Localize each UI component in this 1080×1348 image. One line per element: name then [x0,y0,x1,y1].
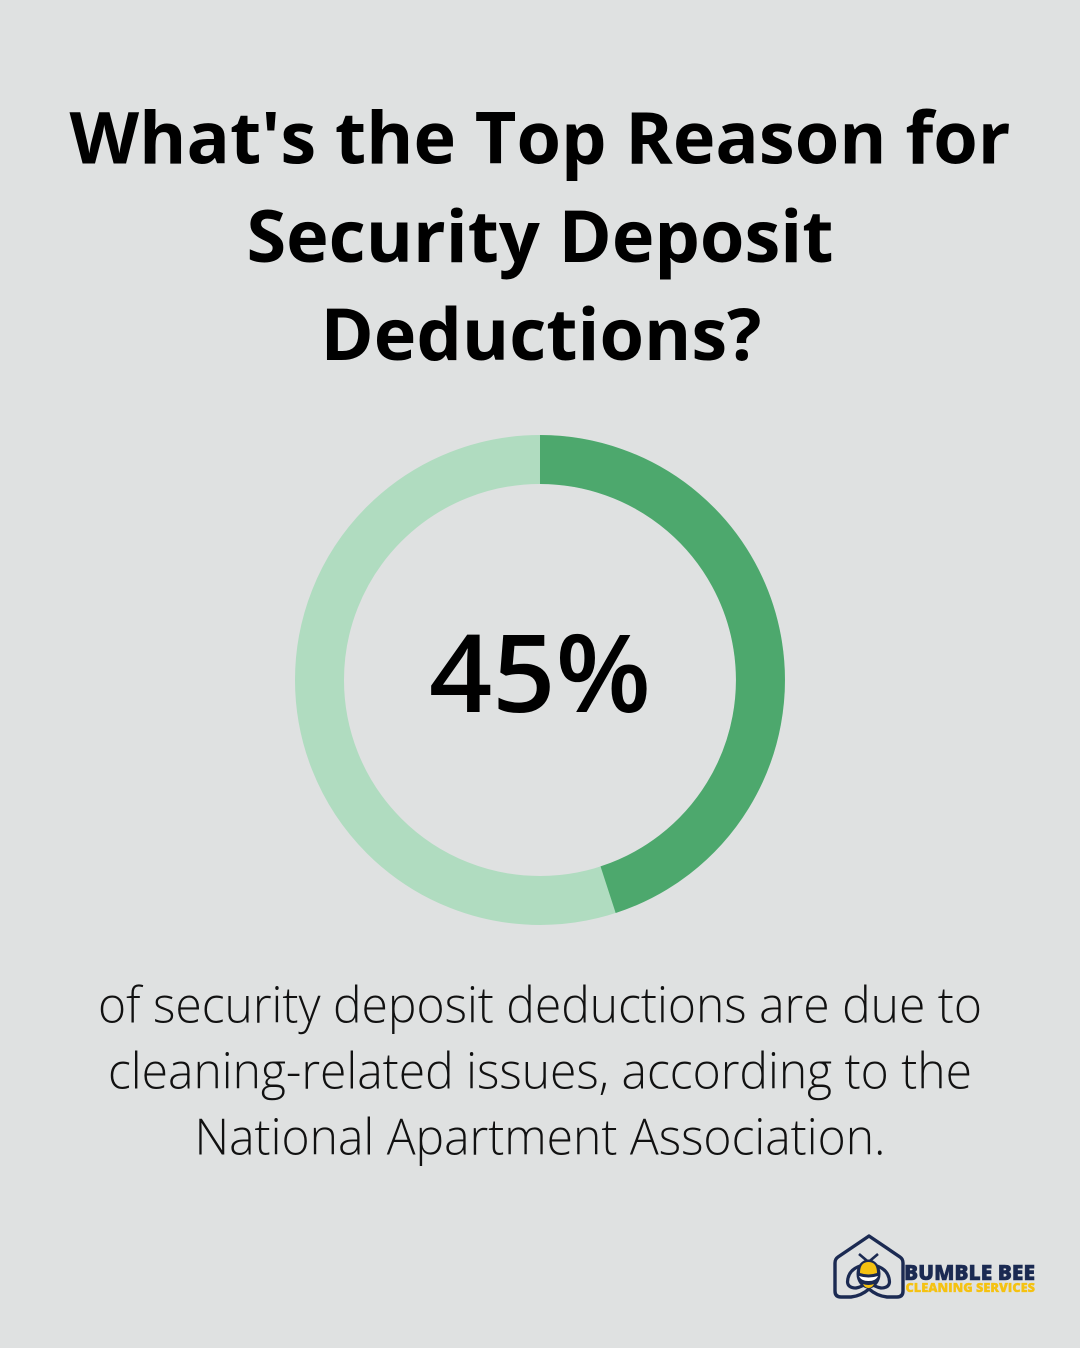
description text: of security deposit deductions are due to [98,970,982,1038]
title: Security Deposit [246,186,834,284]
donut value label: 45% [429,597,651,744]
title: Deductions? [320,284,762,382]
donut track [320,460,760,900]
donut value arc [540,460,760,890]
icon: house with bee [835,1236,903,1297]
logo wordmark: BUMBLE BEE [904,1259,1035,1287]
description text: cleaning-related issues, according to the [108,1036,972,1104]
description text [98,970,982,1170]
logo: Bumble Bee Cleaning Services [835,1236,1035,1297]
logo tagline: CLEANING SERVICES [906,1279,1035,1296]
title: What's the Top Reason for [70,88,1011,186]
donut chart: 45% [320,460,760,900]
description text: National Apartment Association. [194,1102,886,1170]
title [70,88,1011,382]
